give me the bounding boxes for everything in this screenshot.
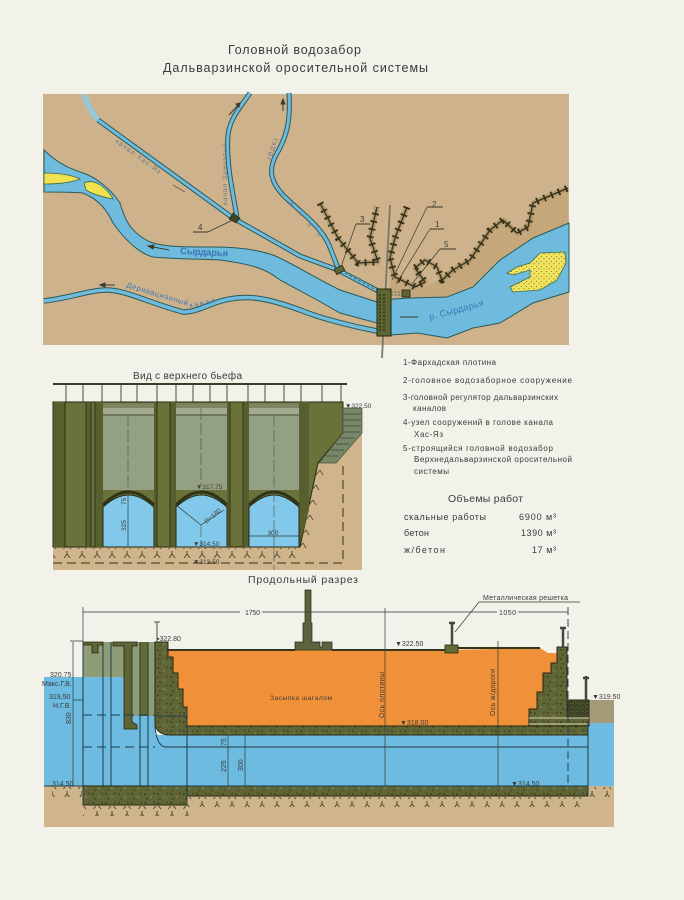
upstream gate block <box>83 642 155 729</box>
labels: 1050 <box>499 610 516 617</box>
table: work volumes: 6900 м³ <box>519 512 556 522</box>
elevation labels: ▼322.50 <box>345 403 372 410</box>
map ground <box>43 94 569 345</box>
panel: upstream view <box>53 370 372 570</box>
panel: site map <box>43 93 569 358</box>
foundation roots <box>53 548 299 558</box>
railing <box>53 384 347 402</box>
legend: 3-головной регулятор дальварзинских <box>403 393 558 402</box>
river: Syr Darya downstream of dam <box>44 150 377 323</box>
dimension lines <box>128 495 299 547</box>
legend: 5-строящийся головной водозабор <box>403 444 554 453</box>
labels: ▼319.50 <box>592 694 620 701</box>
elevation labels: ▼314.50 <box>193 541 220 548</box>
lower ledge <box>529 718 589 724</box>
upstream concrete block <box>155 642 187 735</box>
legend: 4-узел сооружений в голове канала <box>403 418 554 427</box>
sand bar <box>507 252 566 292</box>
labels: 830 <box>66 712 73 724</box>
labels <box>42 610 620 788</box>
structure lines <box>44 642 588 805</box>
table: work volumes: скальные работы <box>404 512 486 522</box>
river and canal names: канал Хас-Яз <box>114 138 162 175</box>
water level dashes <box>83 715 155 747</box>
river and canal names: канал Замчатый <box>221 143 229 205</box>
elevation labels: ▼317.75 <box>196 484 223 491</box>
labels: ▪322.80 <box>157 636 181 643</box>
callout numbers: 3 <box>360 215 365 224</box>
legend: Хас-Яз <box>414 430 443 439</box>
tan strip right <box>589 700 614 723</box>
table: work volumes: Объемы работ <box>448 493 523 505</box>
elevation labels: R=180 <box>204 507 223 525</box>
callout numbers: 1 <box>435 220 440 229</box>
roots <box>187 797 588 807</box>
river: Syr Darya upstream of dam <box>377 223 569 338</box>
elevation labels: 75 <box>121 497 128 505</box>
canal node <box>229 213 240 223</box>
labels: 314.50 <box>52 781 74 788</box>
VDK canal <box>272 93 338 268</box>
legend: Верхнедальварзинской оросительной <box>414 455 572 464</box>
title: Головной водозабор <box>228 43 361 57</box>
river and canal names: р. Сырдарья <box>428 298 485 322</box>
Khas-Yaz canal <box>84 95 380 292</box>
water left <box>44 642 614 786</box>
elevation labels <box>121 403 372 566</box>
gate bay 2 <box>176 403 227 547</box>
cliffs <box>320 188 568 287</box>
labels: 1750 <box>245 610 260 617</box>
labels: Н.Г.В. <box>53 703 72 710</box>
table: work volumes: 1390 м³ <box>521 528 556 538</box>
northern canal <box>228 93 250 217</box>
derivation canal <box>44 290 377 331</box>
dimension lines <box>70 607 568 786</box>
river and canal names: канал <box>189 296 216 310</box>
slope roots <box>299 470 323 548</box>
flow arrows <box>100 99 418 317</box>
heading: Продольный разрез <box>248 574 358 586</box>
gate bay 3 <box>249 403 299 547</box>
table: work volumes: 17 м³ <box>532 545 556 555</box>
callout numbers: 5 <box>444 240 449 249</box>
callout numbers <box>193 200 456 284</box>
intake under construction <box>391 290 410 297</box>
legend: 2-головное водозаборное сооружение <box>403 376 573 385</box>
foundation dashed line <box>53 463 343 563</box>
labels: Макс.Г.В. <box>42 681 72 688</box>
gate bay 1 <box>103 403 154 547</box>
labels: 225 <box>221 760 228 772</box>
road surface and structures <box>154 590 589 700</box>
tunnel floor base <box>83 786 588 805</box>
ground <box>53 433 362 570</box>
labels: ▼314.50 <box>511 781 539 788</box>
legend: 1-Фархадская плотина <box>403 358 497 367</box>
labels: 300 <box>238 759 245 771</box>
dam body <box>53 402 343 547</box>
river and canal names: Деривационный <box>125 280 189 308</box>
labels: Ось плотины <box>379 672 386 718</box>
river and canal names: канал <box>279 190 322 239</box>
title <box>163 43 428 75</box>
brick apron <box>567 700 589 718</box>
orange backfill <box>168 648 557 726</box>
regulator <box>334 265 345 275</box>
panel: longitudinal section <box>42 574 620 827</box>
callout numbers: 4 <box>198 223 203 232</box>
labels: Засыпка шагалом <box>270 695 333 702</box>
labels: ▼318.00 <box>400 720 428 727</box>
labels: ▼322.50 <box>395 641 423 648</box>
river and canal names <box>114 138 485 322</box>
labels: 319,50 <box>49 694 71 701</box>
main dam structure <box>377 289 391 336</box>
table: work volumes: ж/бетон <box>404 545 445 555</box>
labels: 75 <box>221 738 228 746</box>
grate callout: Металлическая решетка <box>483 595 568 602</box>
elevation labels: 300 <box>268 530 279 537</box>
river and canal names: (ВДК) <box>266 138 280 161</box>
labels: Ось ж/дороги <box>490 669 497 716</box>
grate callout <box>455 595 580 632</box>
table: work volumes: бетон <box>404 528 429 538</box>
title: Дальварзинской оросительной системы <box>163 61 428 75</box>
table: work volumes <box>404 493 556 555</box>
slab under backfill <box>187 726 588 735</box>
river and canal names: Сырдарья <box>180 246 228 260</box>
labels: 320.75 <box>50 672 72 679</box>
callout numbers: 2 <box>432 200 437 209</box>
legend <box>403 358 573 476</box>
heading: Вид с верхнего бьефа <box>133 370 242 382</box>
elevation labels: 325 <box>121 520 128 531</box>
downstream stepped block <box>529 647 589 726</box>
legend: каналов <box>413 404 446 413</box>
steps <box>319 408 362 463</box>
ground strip <box>44 786 614 827</box>
elevation labels: ▼313.50 <box>193 559 220 566</box>
legend: системы <box>414 467 449 476</box>
bank terrace <box>390 188 568 298</box>
dam axis <box>382 205 390 358</box>
pier shading <box>54 402 309 547</box>
islands <box>44 173 80 184</box>
